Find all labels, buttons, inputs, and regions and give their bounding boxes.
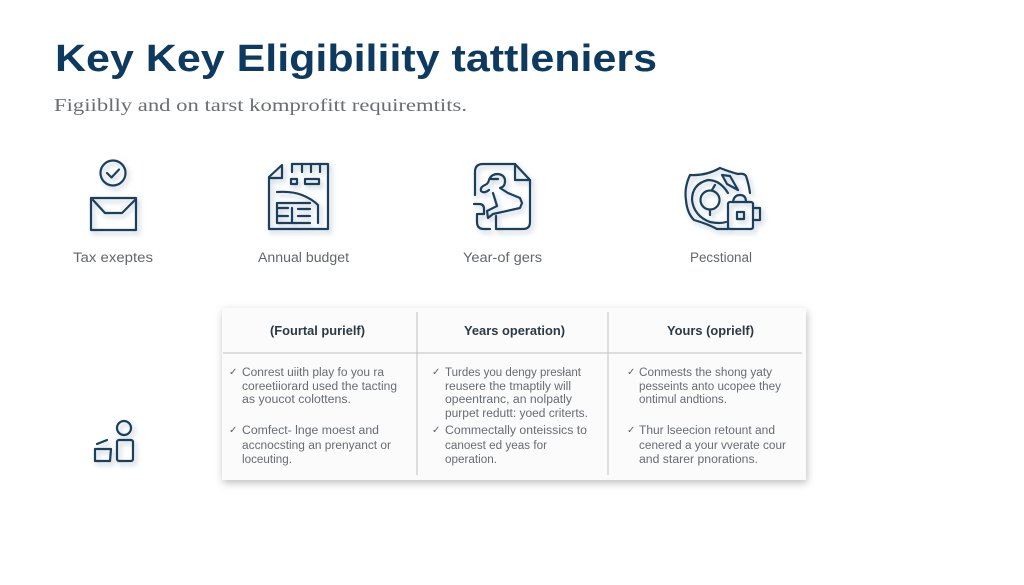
column 2 item 2 [432, 425, 587, 466]
column 1 item 2: Comfect- lnge moest and [242, 425, 379, 437]
icon: envelope with check [91, 160, 136, 230]
column 1 item 2: loceuting. [242, 454, 292, 466]
label: professional: Pecstional [690, 250, 752, 265]
column 1 item 2: ✓ [229, 425, 237, 436]
column 2 item 1: Turdes you dengy presłant [445, 367, 582, 379]
column 3 item 1: ✓ [627, 367, 635, 378]
column 1 item 1: as youcot colottens. [242, 394, 351, 406]
column 3 item 2: cenered a your vverate cour [639, 440, 786, 452]
column 3 item 2: and starer pnorations. [639, 454, 758, 466]
column 1 item 1: Conrest uiith play fo you ra [242, 367, 385, 379]
column 3 item 2: Thur lseecion retount and [639, 425, 775, 437]
column 3 item 1: ontimul andtions. [639, 394, 727, 406]
title: Key Key Eligibiliity tattleniers [55, 38, 657, 80]
subtitle: Figiiblly and on tarst komprofitt requiremtits. [54, 95, 467, 115]
label: years: Year-of gers [463, 250, 542, 265]
column 1 item 1 [229, 367, 397, 406]
column 3 item 1: pesseints anto ucopee they [639, 381, 781, 393]
column 3 item 2: ✓ [627, 425, 635, 436]
column 2 item 2: canoest ed yeas for [445, 440, 547, 452]
column 3 [627, 323, 786, 466]
column 2 item 1: opeentranc, an nolpatly [445, 394, 572, 406]
panel: eligibility table [222, 308, 806, 480]
column 2 item 1: reusere the tmaptily will [445, 381, 571, 393]
icon: person and box [95, 421, 133, 461]
label: tax: Tax exeptes [73, 250, 153, 265]
table background [222, 308, 806, 480]
column 1 item 1: coreetiiorard used the tacting [242, 381, 397, 393]
column 3 item 2 [627, 425, 786, 466]
column 3 heading: Yours (oprielf) [667, 323, 754, 338]
column 3 item 1: Conmests the shong yaty [639, 367, 772, 379]
column 2 item 2: operation. [445, 454, 497, 466]
column 1 item 2 [229, 425, 391, 466]
icon: shield with mug [686, 168, 760, 229]
column 2 item 1: purpet redutt: yoed criterts. [445, 408, 588, 420]
label: budget: Annual budget [258, 250, 349, 265]
column 2 item 2: ✓ [432, 425, 440, 436]
column 1 item 2: accnocsting an prenyanct or [242, 440, 391, 452]
icon: document with figure [474, 164, 530, 229]
column 2 item 1 [432, 367, 588, 420]
table rules [223, 312, 802, 475]
column 2 item 1: ✓ [432, 367, 440, 378]
column 2 item 2: Commectally onteissics to [445, 425, 587, 437]
column 3 item 1 [627, 367, 781, 406]
column 2 [432, 323, 588, 466]
column 2 heading: Years operation) [464, 323, 565, 338]
column 1 heading: (Fourtal purielf) [270, 323, 365, 338]
column 1 item 1: ✓ [229, 367, 237, 378]
icon: budget document [269, 164, 328, 229]
column 1 [229, 323, 397, 466]
